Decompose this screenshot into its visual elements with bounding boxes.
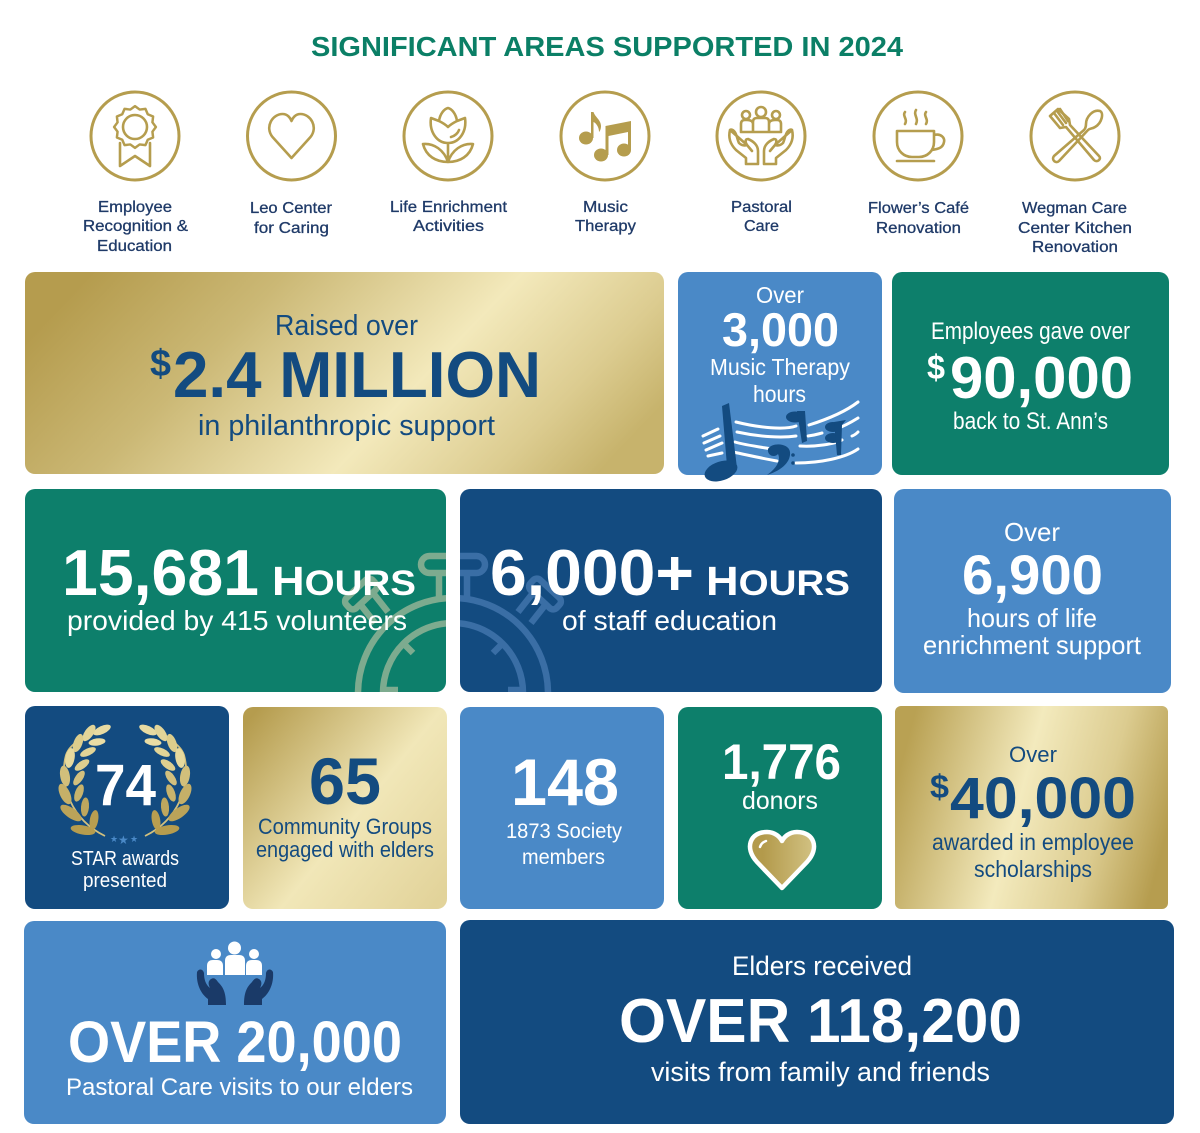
panel: volunteer hours: HOURS bbox=[272, 558, 416, 604]
panel: 1873 society bbox=[460, 707, 664, 909]
label: leo center bbox=[250, 200, 333, 237]
panel: community groups bbox=[243, 707, 447, 909]
label: pastoral care: Care bbox=[744, 218, 779, 235]
label: flowers cafe: Flower’s Café bbox=[868, 200, 969, 217]
icon: music notes bbox=[561, 92, 649, 180]
label: music therapy: Therapy bbox=[575, 218, 636, 235]
panel: pastoral care visits bbox=[24, 921, 446, 1124]
label: pastoral care bbox=[731, 199, 792, 235]
panel: community groups: Community Groups bbox=[258, 814, 432, 839]
panel: community groups: engaged with elders bbox=[256, 837, 434, 862]
label: wegman: Renovation bbox=[1032, 239, 1118, 256]
panel: employees gave: back to St. Ann’s bbox=[953, 408, 1108, 435]
icon: laurel wreath: ★ bbox=[130, 834, 138, 844]
panel: 1873 society: members bbox=[522, 846, 605, 869]
label: music therapy: Music bbox=[583, 199, 628, 216]
label: wegman: Wegman Care bbox=[1022, 200, 1127, 217]
label: leo center: Leo Center bbox=[250, 200, 333, 217]
panel: life enrichment hours bbox=[894, 489, 1171, 693]
panel: raised 2.4 million: in philanthropic support bbox=[198, 410, 495, 442]
icon: laurel wreath bbox=[56, 722, 194, 847]
panel: donors bbox=[678, 707, 882, 909]
panel: music therapy hours: Over bbox=[756, 282, 804, 308]
label: life enrichment bbox=[390, 199, 508, 235]
panel: star awards: 74 bbox=[95, 753, 156, 818]
panel: employees gave: $ bbox=[927, 349, 945, 387]
panel: life enrichment hours: hours of life bbox=[967, 603, 1097, 633]
icon: employee recognition ribbon bbox=[91, 92, 179, 180]
panel: raised 2.4 million bbox=[25, 272, 664, 474]
panel: raised 2.4 million: $ bbox=[150, 343, 171, 385]
icon: laurel wreath: ★ bbox=[118, 833, 129, 847]
icon: heart bbox=[248, 92, 336, 180]
panel: family visits: Elders received bbox=[732, 951, 912, 981]
panel: donors: donors bbox=[742, 787, 818, 815]
panel: life enrichment hours: 6,900 bbox=[962, 543, 1103, 606]
icon: hands holding people bbox=[197, 942, 273, 1005]
panel: employee scholarships bbox=[895, 706, 1168, 909]
icon labels bbox=[83, 199, 1132, 256]
icon: music staff and notes bbox=[702, 402, 858, 485]
panel: music therapy hours: 3,000 bbox=[722, 303, 839, 356]
label: employee recognition: Employee bbox=[98, 199, 172, 216]
panel: staff education bbox=[460, 489, 882, 692]
panel: pastoral care visits: Pastoral Care visits to our elders bbox=[66, 1074, 413, 1101]
panel: star awards bbox=[25, 706, 229, 909]
panel: raised 2.4 million: Raised over bbox=[275, 310, 418, 342]
label: employee recognition: Education bbox=[97, 238, 172, 255]
panel: life enrichment hours: Over bbox=[1004, 517, 1060, 547]
panel: staff education: 6,000+ bbox=[490, 536, 694, 609]
label: employee recognition: Recognition & bbox=[83, 218, 188, 235]
icon row bbox=[91, 92, 1119, 180]
panel: star awards: presented bbox=[83, 870, 167, 892]
panel: volunteer hours: provided by 415 volunteers bbox=[67, 605, 407, 636]
panel: volunteer hours: 15,681 bbox=[62, 536, 259, 609]
panel: star awards: STAR awards bbox=[71, 848, 179, 870]
panel: volunteer hours bbox=[25, 489, 446, 692]
panel: 1873 society: 148 bbox=[511, 745, 619, 819]
icon: pastoral hands and people bbox=[717, 92, 805, 180]
icon: gold heart bbox=[750, 832, 814, 888]
label: wegman: Center Kitchen bbox=[1018, 220, 1132, 237]
label: pastoral care: Pastoral bbox=[731, 199, 792, 216]
panel: employees gave: Employees gave over bbox=[931, 318, 1130, 345]
panel: music therapy hours: Music Therapy bbox=[710, 354, 850, 380]
label: life enrichment: Activities bbox=[413, 218, 484, 235]
label: wegman bbox=[1018, 200, 1132, 256]
label: music therapy bbox=[575, 199, 636, 235]
icon: coffee cup bbox=[874, 92, 962, 180]
icon: tulip bbox=[404, 92, 492, 180]
panel: family visits: OVER 118,200 bbox=[619, 987, 1022, 1056]
panel: life enrichment hours: enrichment support bbox=[923, 630, 1142, 660]
panel: staff education: HOURS bbox=[706, 558, 850, 604]
panel: pastoral care visits: OVER 20,000 bbox=[68, 1010, 402, 1075]
panel: employee scholarships: awarded in employee bbox=[932, 829, 1134, 855]
panel: family visits bbox=[460, 920, 1174, 1124]
icon: fork and spoon bbox=[1031, 92, 1119, 180]
panel: employee scholarships: scholarships bbox=[974, 856, 1092, 882]
panel: donors: 1,776 bbox=[722, 734, 841, 790]
title: SIGNIFICANT AREAS SUPPORTED IN 2024 bbox=[311, 31, 903, 62]
panel: 1873 society: 1873 Society bbox=[506, 820, 622, 843]
panel: music therapy hours bbox=[678, 272, 882, 485]
panel: employee scholarships: $ bbox=[930, 768, 949, 805]
label: flowers cafe: Renovation bbox=[876, 220, 961, 237]
label: flowers cafe bbox=[868, 200, 969, 237]
label: employee recognition bbox=[83, 199, 188, 255]
panel: family visits: visits from family and friends bbox=[651, 1057, 990, 1087]
label: life enrichment: Life Enrichment bbox=[390, 199, 508, 216]
panel: music therapy hours: hours bbox=[753, 381, 806, 407]
panel: employee scholarships: 40,000 bbox=[950, 766, 1136, 831]
label: leo center: for Caring bbox=[254, 220, 329, 237]
panel: employees gave bbox=[892, 272, 1169, 475]
panel: raised 2.4 million: 2.4 MILLION bbox=[173, 338, 541, 411]
icon: laurel wreath: ★ bbox=[110, 834, 118, 844]
panel: community groups: 65 bbox=[309, 744, 381, 818]
panel: employee scholarships: Over bbox=[1009, 742, 1057, 767]
panel: staff education: of staff education bbox=[562, 605, 777, 636]
panel: employees gave: 90,000 bbox=[950, 345, 1133, 411]
